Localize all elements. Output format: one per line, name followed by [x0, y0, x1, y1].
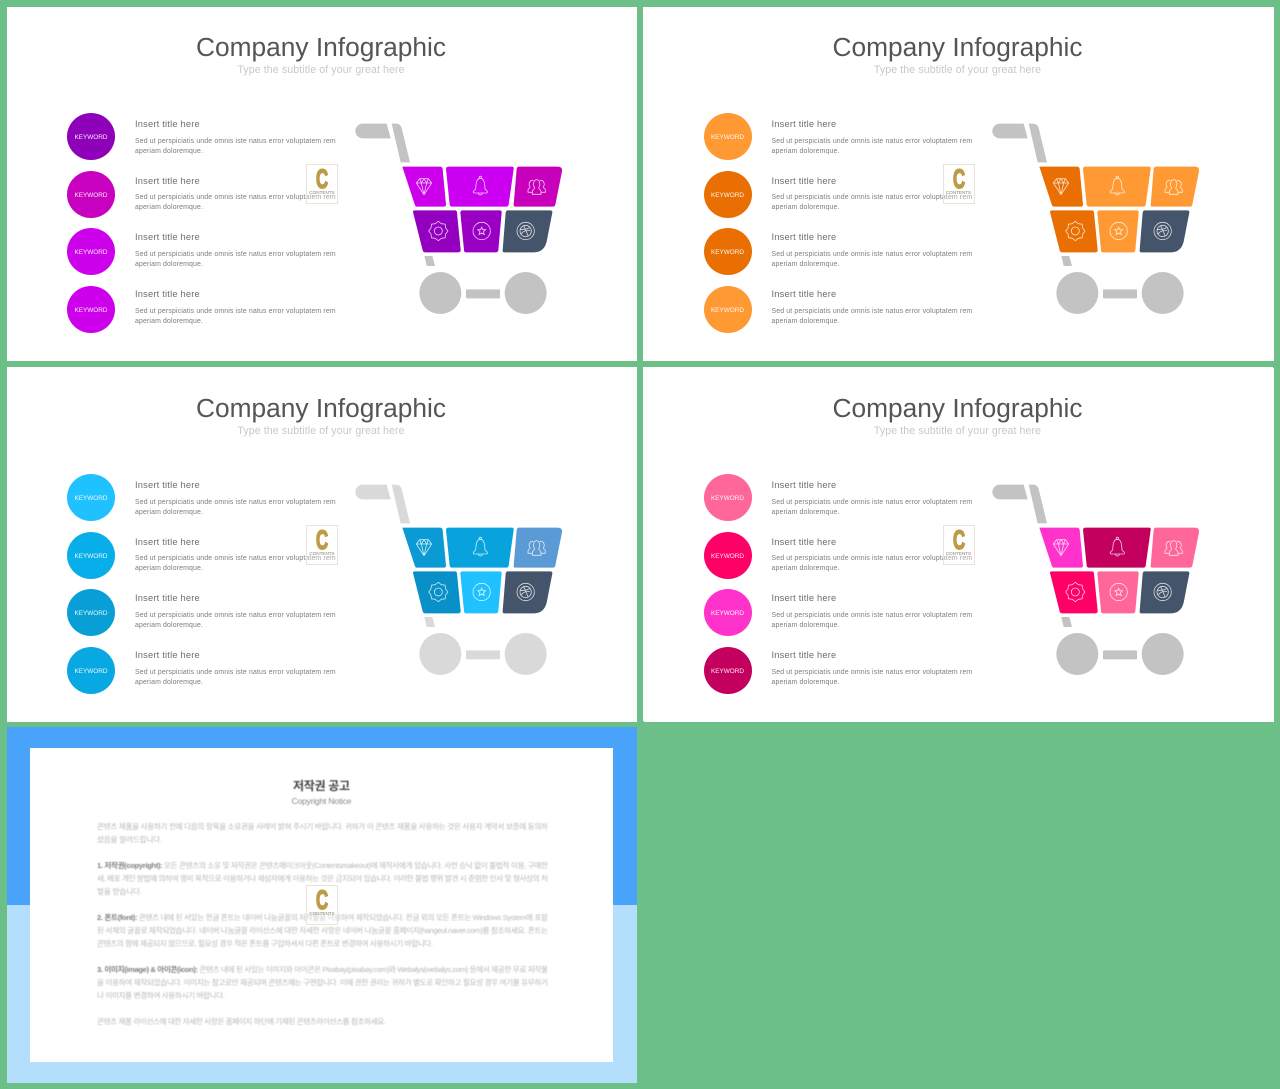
- list item 2: KEYWORD: [711, 192, 744, 199]
- watermark logo: CONTENTS: [946, 190, 971, 195]
- list item 2: aperiam doloremque.: [135, 565, 203, 572]
- list item 4: [67, 647, 336, 694]
- section 1 copyright: 벌을 받습니다.: [97, 886, 142, 896]
- list item 2: KEYWORD: [74, 192, 108, 199]
- list item 1: aperiam doloremque.: [772, 148, 840, 155]
- list item 1: Insert title here: [772, 480, 836, 490]
- list item 3: [704, 589, 972, 636]
- watermark logo: CONTENTS: [309, 190, 335, 195]
- list item 3: aperiam doloremque.: [135, 261, 203, 268]
- watermark logo: CONTENTS: [946, 551, 971, 556]
- list item 4: KEYWORD: [711, 307, 744, 314]
- list item 3: KEYWORD: [74, 610, 108, 617]
- list item 2: [704, 171, 972, 218]
- title: Company Infographic: [833, 393, 1082, 423]
- list item 3: Sed ut perspiciatis unde omnis iste natus error voluptatem rem: [135, 251, 336, 258]
- list item 2: [67, 171, 336, 218]
- subtitle: Type the subtitle of your great here: [874, 425, 1041, 437]
- list item 4: [67, 286, 336, 333]
- notice card: [30, 748, 613, 1062]
- list item 1: Insert title here: [135, 119, 200, 129]
- list item 1: Insert title here: [135, 480, 200, 490]
- list item 4: Sed ut perspiciatis unde omnis iste natus error voluptatem rem: [135, 668, 336, 676]
- watermark logo: [306, 885, 338, 925]
- watermark logo: C: [316, 885, 328, 915]
- section 2 font: [97, 912, 548, 948]
- list item 1: [704, 474, 972, 521]
- closing line: 콘텐츠 제품 라이선스에 대한 자세한 사항은 홈페이지 하단에 기재된 콘텐츠라이선스를 참조하세요.: [97, 1016, 386, 1026]
- list item 1: Sed ut perspiciatis unde omnis iste natus error voluptatem rem: [772, 499, 972, 506]
- section 1 copyright: [97, 860, 548, 896]
- list item 4: KEYWORD: [74, 668, 108, 675]
- list item 1: [704, 113, 972, 160]
- list item 3: KEYWORD: [711, 249, 744, 256]
- list item 2: aperiam doloremque.: [135, 204, 203, 211]
- section 2 font: 2. 폰트(font): 콘텐츠 내에 된 서있는 한글 폰트는 네이버 나눔글꼴의 저작물을 이용하여 제작되었습니다. 한글 외의 모든 폰트는 Windows System에 포함: [97, 912, 548, 922]
- list item 4: KEYWORD: [74, 307, 108, 314]
- subtitle: Type the subtitle of your great here: [237, 425, 405, 437]
- watermark logo: [306, 525, 338, 565]
- list item 3: Sed ut perspiciatis unde omnis iste natus error voluptatem rem: [772, 251, 972, 258]
- list item 3: [67, 228, 336, 275]
- list item 3: KEYWORD: [74, 249, 108, 256]
- section 2 font: 된 서체의 글꼴로 제작되었습니다. 네이버 나눔글꼴 라이선스에 대한 자세한 사항은 네이버 나눔글꼴 홈페이지(hangeul.naver.com)를 참조하세요. 폰트는: [97, 925, 548, 935]
- section 1 copyright: 1. 저작권(copyright): 모든 콘텐츠의 소유 및 저작권은 콘텐츠메이크아웃(Contentsmakeout)에 제작사에게 있습니다. 사전 승낙 없이 불법적 이용, 구매한: [97, 860, 548, 870]
- list item 4: KEYWORD: [711, 668, 744, 675]
- section 3 image and icon: 나 이미지를 변경하여 사용하시기 바랍니다.: [97, 990, 225, 1000]
- shopping cart chart: [992, 124, 1200, 314]
- list item 2: Insert title here: [772, 537, 836, 547]
- list item 1: Sed ut perspiciatis unde omnis iste natus error voluptatem rem: [135, 499, 336, 506]
- watermark logo: [306, 164, 338, 204]
- watermark logo: C: [316, 164, 328, 194]
- list item 3: aperiam doloremque.: [772, 622, 840, 629]
- list item 4: aperiam doloremque.: [772, 679, 840, 686]
- list item 4: aperiam doloremque.: [135, 679, 203, 686]
- intro paragraph: 셨음을 알려드립니다.: [97, 834, 162, 844]
- list item 4: Insert title here: [772, 650, 836, 660]
- shopping cart chart: [992, 484, 1200, 675]
- list item 1: Sed ut perspiciatis unde omnis iste natus error voluptatem rem: [772, 138, 972, 145]
- watermark logo: CONTENTS: [309, 911, 335, 916]
- list item 3: Insert title here: [135, 232, 200, 242]
- list item 2: Sed ut perspiciatis unde omnis iste natus error voluptatem rem: [772, 194, 972, 201]
- list item 4: Sed ut perspiciatis unde omnis iste natus error voluptatem rem: [135, 308, 336, 314]
- watermark logo: CONTENTS: [309, 551, 335, 556]
- list item 2: [67, 532, 336, 579]
- list item 1: aperiam doloremque.: [772, 509, 840, 516]
- list item 2: Insert title here: [135, 537, 200, 547]
- watermark logo: C: [952, 525, 965, 555]
- list item 4: [704, 647, 972, 694]
- panel: pink cart infographic: [644, 368, 1274, 722]
- title: Company Infographic: [833, 32, 1082, 62]
- notice subheading: Copyright Notice: [292, 796, 352, 806]
- subtitle: Type the subtitle of your great here: [874, 64, 1041, 76]
- notice text: [96, 778, 548, 1026]
- list item 2: Insert title here: [135, 176, 200, 186]
- list item 4: [704, 286, 972, 333]
- list item 3: Sed ut perspiciatis unde omnis iste natus error voluptatem rem: [135, 612, 336, 619]
- list item 1: Insert title here: [772, 119, 836, 129]
- list item 4: Insert title here: [772, 289, 836, 299]
- list item 3: Insert title here: [772, 232, 836, 242]
- panel: blue cart infographic: [7, 368, 637, 722]
- panel: orange cart infographic: [644, 7, 1274, 361]
- section 3 image and icon: 3. 이미지(image) & 아이콘(icon): 콘텐츠 내에 된 사있는 이미지와 아이콘은 Pixabay(pixabay.com)와 Webalys(webalys.com) 등에서 제공한 무료 저작물: [97, 964, 548, 974]
- list item 1: KEYWORD: [711, 495, 744, 502]
- list item 3: aperiam doloremque.: [772, 261, 840, 268]
- section 1 copyright: 새, 배포 개인 방법에 의하여 영리 목적으로 이용하거나 제삼자에게 이용하는 것은 금지되어 있습니다. 이러한 불법 행위 발견 시 준엄한 민사 및 형사상의 처: [97, 873, 548, 883]
- list item 2: Sed ut perspiciatis unde omnis iste natus error voluptatem rem: [135, 555, 336, 562]
- list item 1: aperiam doloremque.: [135, 148, 203, 155]
- section 3 image and icon: 을 이용하여 제작되었습니다. 이미지는 참고로만 제공되며 콘텐츠에는 구현합니다. 이에 관한 권리는 귀하가 별도로 확인하고 필요성 경우 여기를 유무하거: [97, 977, 548, 987]
- list item 3: Insert title here: [772, 593, 836, 603]
- list item 3: KEYWORD: [711, 610, 744, 617]
- shopping cart chart: [355, 124, 562, 314]
- list item 4: Sed ut perspiciatis unde omnis iste natus error voluptatem rem: [772, 668, 972, 676]
- list item 1: [67, 474, 336, 521]
- list item 2: KEYWORD: [711, 553, 744, 560]
- panel: purple cart infographic: [7, 7, 637, 361]
- list item 1: KEYWORD: [74, 134, 108, 141]
- list item 3: Insert title here: [135, 593, 200, 603]
- list item 2: Sed ut perspiciatis unde omnis iste natus error voluptatem rem: [135, 194, 336, 201]
- shopping cart chart: [355, 484, 562, 675]
- watermark logo: [942, 164, 974, 204]
- list item 1: KEYWORD: [711, 134, 744, 141]
- panel: copyright notice: [7, 727, 637, 1083]
- list item 4: aperiam doloremque.: [772, 318, 840, 325]
- watermark logo: [942, 525, 974, 565]
- lower background band: [7, 905, 637, 1083]
- list item 1: KEYWORD: [74, 495, 108, 502]
- subtitle: Type the subtitle of your great here: [237, 64, 405, 76]
- list item 4: Insert title here: [135, 289, 200, 299]
- list item 3: [704, 228, 972, 275]
- list item 1: aperiam doloremque.: [135, 509, 203, 516]
- list item 2: Sed ut perspiciatis unde omnis iste natus error voluptatem rem: [772, 555, 972, 562]
- list item 2: Insert title here: [772, 176, 836, 186]
- list item 1: [67, 113, 336, 160]
- list item 2: aperiam doloremque.: [772, 204, 840, 211]
- list item 2: KEYWORD: [74, 553, 108, 560]
- list item 3: aperiam doloremque.: [135, 622, 203, 629]
- list item 4: aperiam doloremque.: [135, 318, 203, 325]
- list item 4: Insert title here: [135, 650, 200, 660]
- watermark logo: C: [316, 525, 328, 555]
- section 3 image and icon: [97, 964, 548, 1000]
- list item 2: [704, 532, 972, 579]
- title: Company Infographic: [196, 393, 446, 423]
- intro paragraph: 콘텐츠 제품을 사용하기 전에 다음의 항목을 소유권을 사례이 밝혀 주시기 바랍니다. 귀하가 이 콘텐츠 제품을 사용하는 것은 사용자 계약서 보증에 동의하: [97, 821, 548, 831]
- list item 3: Sed ut perspiciatis unde omnis iste natus error voluptatem rem: [772, 612, 972, 619]
- notice heading: 저작권 공고: [293, 778, 350, 793]
- list item 4: Sed ut perspiciatis unde omnis iste natus error voluptatem rem: [772, 308, 972, 314]
- list item 2: aperiam doloremque.: [772, 565, 840, 572]
- intro paragraph: [97, 821, 548, 844]
- list item 1: Sed ut perspiciatis unde omnis iste natus error voluptatem rem: [135, 138, 336, 145]
- section 2 font: 콘텐츠의 팜에 제공되지 않으므로, 필요성 경우 적은 폰트를 구입하셔서 다른 폰트로 변경하여 사용하시기 바랍니다.: [97, 938, 433, 948]
- list item 3: [67, 589, 336, 636]
- title: Company Infographic: [196, 32, 446, 62]
- watermark logo: C: [952, 164, 965, 194]
